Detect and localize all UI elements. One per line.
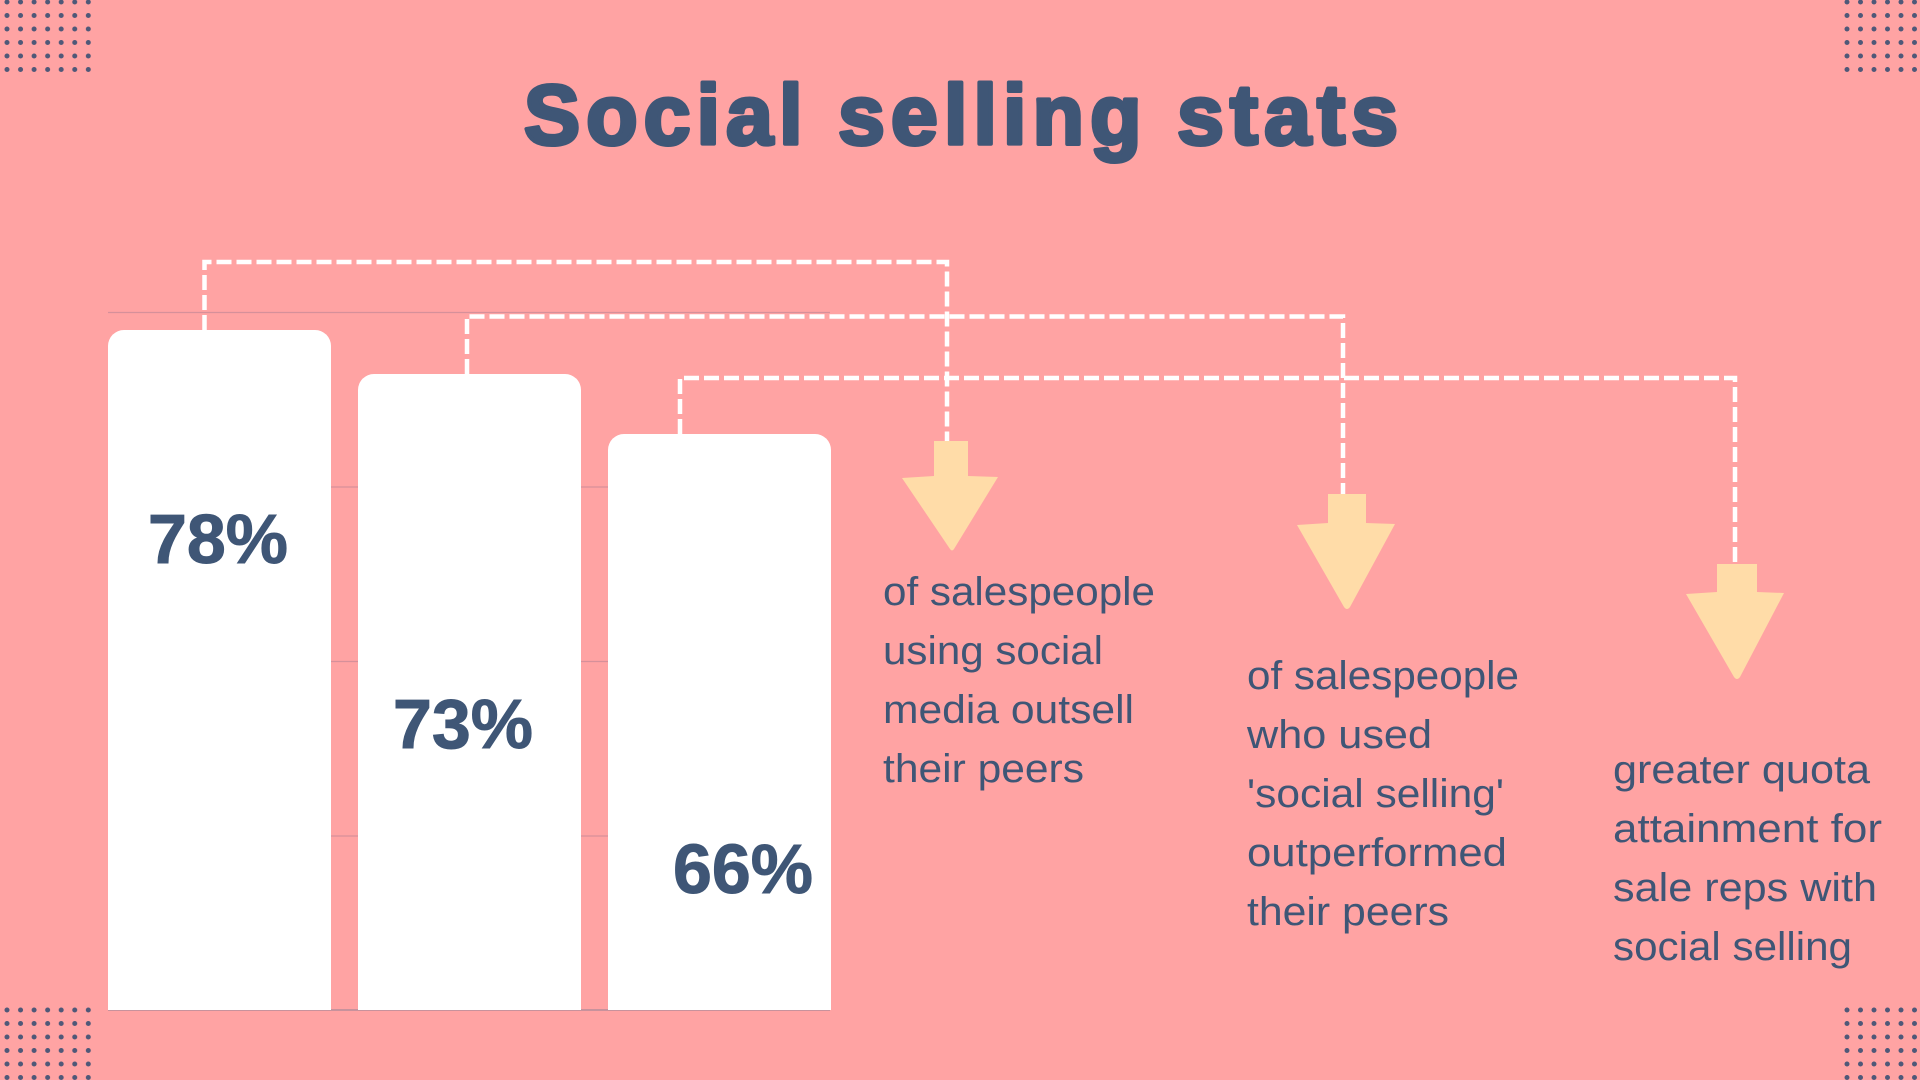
text: third stat description: sale reps with (1613, 866, 1877, 910)
text: first stat description: using social (883, 629, 1103, 673)
arrow 1 (902, 441, 998, 550)
connector: 73% to second arrow (467, 316, 1343, 494)
bar: 78% (108, 330, 331, 1010)
bar: 66% (608, 434, 831, 1010)
text: third stat description (1613, 748, 1882, 969)
dot grid: top right (1844, 0, 1920, 73)
bar: 73% (358, 374, 581, 1010)
text: first stat description (883, 570, 1155, 791)
text: first stat description: media outsell (883, 688, 1134, 732)
bar: 78%: 78% (148, 500, 288, 578)
connector: 78% to first arrow (204, 262, 947, 441)
bar: 66%: 66% (673, 830, 813, 908)
text: third stat description: greater quota (1613, 748, 1871, 792)
text: second stat description (1246, 654, 1519, 934)
title: Social selling stats (524, 68, 1398, 162)
text: second stat description: who used (1246, 713, 1432, 757)
text: second stat description: outperformed (1247, 831, 1507, 875)
text: third stat description: social selling (1613, 925, 1852, 969)
dot grid: bottom left (4, 1007, 92, 1080)
arrow 2 (1297, 494, 1395, 609)
bar: 73%: 73% (393, 685, 533, 763)
text: second stat description: 'social selling' (1247, 772, 1504, 816)
dot grid: top left (4, 0, 92, 73)
text: first stat description: of salespeople (883, 570, 1155, 614)
text: second stat description: of salespeople (1247, 654, 1519, 698)
connector: 66% to third arrow (680, 378, 1735, 564)
arrow 3 (1686, 564, 1784, 679)
text: second stat description: their peers (1247, 890, 1449, 934)
bar chart (108, 330, 831, 1010)
dot grid: bottom right (1844, 1007, 1920, 1080)
text: first stat description: their peers (883, 747, 1084, 791)
text: third stat description: attainment for (1613, 807, 1882, 851)
